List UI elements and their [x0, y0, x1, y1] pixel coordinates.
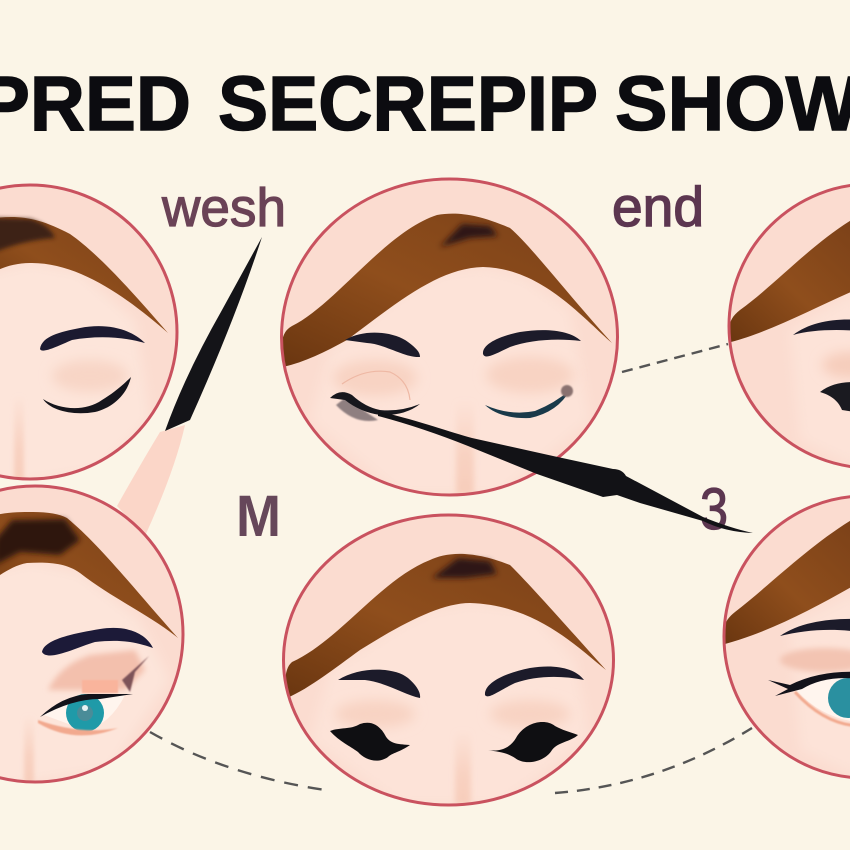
panel: bottom right eye — [723, 496, 850, 778]
nose shading — [454, 421, 476, 493]
upper liner and lashes — [768, 672, 850, 696]
eyeshadow — [780, 648, 850, 672]
panel: bottom left eye — [0, 486, 183, 790]
right closed eye liner — [485, 395, 566, 418]
upper liner — [40, 694, 133, 717]
dashed connector: top right — [622, 344, 728, 372]
left eye blob — [330, 723, 410, 761]
eye white — [44, 696, 124, 724]
skin — [790, 290, 850, 468]
brow — [42, 628, 153, 656]
left eyelid — [342, 371, 410, 400]
hair — [0, 217, 168, 333]
eyelid shading — [335, 700, 415, 728]
skin — [310, 603, 590, 805]
panel: top left eye — [0, 185, 177, 490]
panel: top right eye — [729, 184, 850, 468]
title: SECREPIP — [218, 61, 598, 147]
panel: top center eyes — [282, 179, 618, 495]
hair — [285, 554, 606, 698]
brow left — [338, 670, 420, 698]
lash smudge — [561, 385, 573, 397]
nose shading — [24, 715, 34, 783]
brow — [793, 320, 850, 335]
brow — [780, 619, 850, 636]
lid shade — [52, 360, 128, 392]
iris — [66, 694, 104, 732]
eye white — [795, 678, 850, 722]
icon: eyeliner pen top left — [117, 237, 262, 536]
nose shading — [13, 414, 25, 478]
nose shading — [455, 730, 471, 805]
brow right — [485, 666, 584, 696]
title: SHOW — [615, 61, 850, 147]
lashes — [336, 398, 378, 421]
lower lid — [38, 720, 118, 735]
skin — [0, 270, 143, 476]
orange lid — [82, 680, 118, 693]
dashed connector: bottom left — [150, 732, 325, 790]
eyelid shading — [333, 360, 417, 396]
hair — [729, 215, 850, 342]
iris — [828, 678, 850, 718]
brow left — [345, 333, 420, 357]
hair — [723, 515, 850, 644]
dashed connector: bottom right — [555, 728, 752, 793]
label: wesh: wesh — [161, 178, 286, 238]
skin — [790, 590, 850, 778]
label: end: end — [612, 175, 704, 238]
icon: eyeliner pen center — [378, 411, 753, 533]
eye — [820, 382, 850, 412]
winged liner — [122, 656, 149, 692]
title — [0, 61, 850, 147]
eyeshadow band — [48, 650, 145, 690]
brow — [40, 326, 145, 351]
closed eye — [43, 377, 131, 413]
skin — [310, 267, 590, 495]
hair — [282, 214, 612, 367]
brow right — [483, 330, 581, 356]
right eye blob — [488, 722, 578, 762]
label: M: M — [236, 484, 281, 549]
left closed eye liner — [330, 392, 420, 415]
lower lid — [795, 692, 850, 726]
panel: bottom center eyes — [284, 515, 614, 805]
hair — [0, 512, 178, 638]
skin — [0, 568, 162, 779]
label: 3: 3 — [700, 477, 728, 542]
eye shade — [822, 352, 850, 378]
